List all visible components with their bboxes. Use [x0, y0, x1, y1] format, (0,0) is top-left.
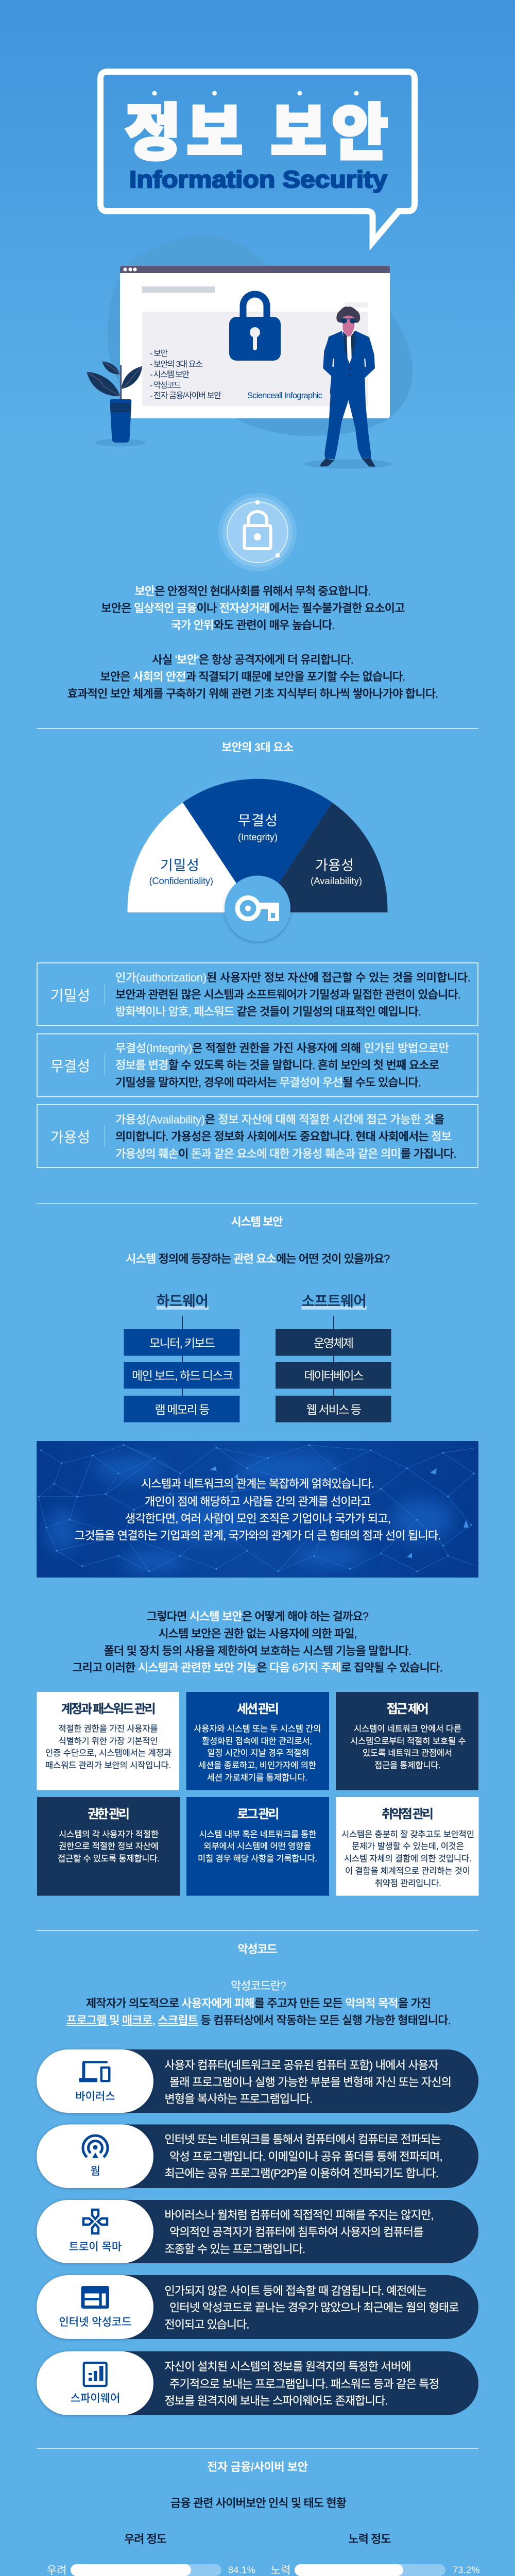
card body: 세션 가로채기를 통제합니다.	[207, 1773, 307, 1783]
availability description	[115, 1113, 457, 1160]
card: log: 로그 관리	[237, 1807, 279, 1821]
contents list: - 보안	[150, 349, 168, 358]
hardware column	[124, 1293, 239, 1422]
bubble outline	[100, 72, 415, 242]
pill: worm: 웜	[90, 2165, 100, 2177]
icon: key	[225, 876, 290, 942]
card: access control	[336, 1692, 478, 1790]
paragraph 2: 보안은 사회의 안전과 직결되기 때문에 보안을 포기할 수는 없습니다.	[100, 670, 406, 683]
confidentiality description: 인가(authorization)된 사용자만 정보 자산에 접근할 수 있는 것을 의미합니다.	[115, 971, 471, 984]
system security explanation: 그렇다면 시스템 보안은 어떻게 해야 하는 걸까요?	[147, 1610, 369, 1623]
network text	[75, 1478, 441, 1542]
spyware text: 정보를 원격지에 보내는 스파이웨어도 존재합니다.	[165, 2395, 388, 2408]
label: integrity: 무결성	[238, 813, 278, 828]
card body: 시스템으로부터 적절히 보호될 수	[350, 1736, 466, 1746]
integrity description	[115, 1042, 449, 1089]
subheading: effort: 노력 정도	[348, 2533, 391, 2546]
label: availability: 가용성	[315, 858, 354, 873]
panel: availability: 가용성	[50, 1129, 90, 1145]
card body	[58, 1829, 160, 1863]
paragraph 1: 보안은 안정적인 현대사회를 위해서 무척 중요합니다.	[135, 585, 371, 598]
card body: 세션을 종료하고, 비인가자에 의한	[198, 1760, 316, 1770]
hero illustration	[87, 235, 413, 469]
network text: 개인이 점에 해당하고 사람들 간의 관계를 선이라고	[145, 1495, 371, 1508]
speech bubble title	[100, 72, 415, 242]
integrity description: 무결성(Integrity)은 적절한 권한을 가진 사용자에 의해 인가된 방법으로만	[115, 1042, 449, 1055]
malware definition	[66, 1979, 451, 2027]
spyware text: 자신이 설치된 시스템의 정보를 원격지의 특정한 서버에	[165, 2360, 411, 2373]
card: account and password	[37, 1692, 179, 1790]
card body	[194, 1724, 321, 1783]
network text: 생각한다면, 여러 사람이 모인 조직은 기업이나 국가가 되고,	[125, 1512, 391, 1525]
pill: trojan: 트로이 목마	[69, 2241, 122, 2253]
progress bars: effort: 73.2%	[453, 2565, 480, 2575]
malware definition: 프로그램 및 매크로, 스크립트 등 컴퓨터상에서 작동하는 모든 실행 가능한 형태입니다.	[66, 2014, 451, 2027]
paragraph 2: 사실 '보안'은 항상 공격자에게 더 유리합니다.	[152, 653, 354, 666]
credit label: Scienceall Infographic	[247, 391, 322, 400]
card: vulnerability: 취약점 관리	[382, 1807, 434, 1821]
card body: 접근을 통제합니다.	[374, 1760, 441, 1770]
heading: malware: 악성코드	[238, 1943, 277, 1956]
panel: availability	[37, 1105, 478, 1167]
card body: 시스템은 충분히 잘 갖추고도 보안적인	[341, 1829, 474, 1839]
virus text: 사용자 컴퓨터(네트워크로 공유된 컴퓨터 포함) 내에서 사용자	[165, 2059, 439, 2072]
software item 1: 운영체제	[314, 1336, 354, 1350]
panel: confidentiality	[37, 963, 478, 1026]
paragraph 1	[101, 585, 405, 632]
confidentiality description: 방화벽이나 암호, 패스워드 같은 것들이 기밀성의 대표적인 예입니다.	[115, 1005, 421, 1018]
panel: confidentiality: 기밀성	[50, 988, 90, 1004]
panel: integrity	[37, 1033, 478, 1096]
card: session: 세션 관리	[237, 1702, 279, 1716]
title english: Information Security	[129, 166, 387, 193]
heading: three elements: 보안의 3대 요소	[221, 741, 294, 754]
card body: 시스템 내부 혹은 네트워크를 통한	[199, 1829, 316, 1839]
contents list: - 악성코드	[150, 381, 181, 390]
card body	[198, 1829, 317, 1863]
network text: 그것들을 연결하는 기업과의 관계, 국가와의 관계가 더 큰 형태의 점과 선이 됩니다.	[75, 1529, 441, 1542]
contents list	[150, 349, 221, 400]
system security explanation: 그리고 이러한 시스템과 관련한 보안 기능은 다음 6가지 주제로 집약될 수 있습니다.	[72, 1662, 443, 1674]
availability description: 가용성의 훼손이 돈과 같은 요소에 대한 가용성 훼손과 같은 의미를 가집니다.	[115, 1147, 457, 1160]
virus text: 몰래 프로그램이나 실행 가능한 부분을 변형해 자신 또는 자신의	[169, 2076, 452, 2089]
contents list: - 보안의 3대 요소	[150, 360, 203, 369]
contents list: - 전자 금융/사이버 보안	[150, 391, 221, 400]
card: authority: 권한 관리	[88, 1807, 130, 1821]
trojan text: 조종할 수 있는 프로그램입니다.	[165, 2243, 305, 2256]
card body: 문제가 발생할 수 있는데, 이것은	[352, 1841, 464, 1851]
card body: 활성화된 접속에 대한 관리로서,	[202, 1736, 312, 1746]
hardware item 1: 모니터, 키보드	[149, 1336, 215, 1350]
hardware item 3	[124, 1396, 239, 1422]
network text: 시스템과 네트워크의 관계는 복잡하게 얽혀있습니다.	[141, 1478, 374, 1490]
label: integrity	[238, 813, 278, 842]
heading: system security: 시스템 보안	[231, 1215, 283, 1228]
pill: virus	[37, 2049, 478, 2113]
card body: 적절한 권한을 가진 사용자를	[59, 1724, 158, 1734]
progress bars: concern	[37, 2564, 256, 2576]
pill: internet malware	[37, 2275, 478, 2339]
confidentiality description: 보안과 관련된 많은 시스템과 소프트웨어가 기밀성과 밀접한 관련이 있습니다.	[115, 988, 461, 1001]
trojan text	[165, 2209, 434, 2256]
card body: 시스템 자체의 결함에 의한 것입니다.	[344, 1854, 472, 1863]
heading: e-finance cyber security: 전자 금융/사이버 보안	[207, 2461, 308, 2473]
contents list: - 시스템 보안	[150, 370, 190, 379]
card: vulnerability	[336, 1797, 479, 1896]
progress bars: effort	[261, 2564, 480, 2576]
card: authority	[37, 1797, 180, 1896]
spyware text	[165, 2360, 439, 2408]
segment: confidentiality	[128, 803, 236, 912]
label: confidentiality: (Confidentiality)	[149, 875, 213, 886]
virus text	[165, 2059, 452, 2105]
card body	[45, 1724, 171, 1770]
pill: worm	[37, 2125, 478, 2188]
internet malware text	[165, 2284, 459, 2331]
hardware heading: 하드웨어	[157, 1293, 209, 1309]
card body: 사용자와 시스템 또는 두 시스템 간의	[194, 1724, 321, 1734]
pill: trojan	[37, 2200, 478, 2263]
card body: 시스템의 각 사용자가 적절한	[59, 1829, 159, 1839]
software item 3	[276, 1396, 391, 1422]
question: system elements: 시스템 정의에 등장하는 관련 요소에는 어떤 것이 있을까요?	[126, 1252, 390, 1265]
card body: 패스워드 관리가 보안의 시작입니다.	[45, 1760, 171, 1770]
trojan text: 악의적인 공격자가 컴퓨터에 침투하여 사용자의 컴퓨터를	[169, 2226, 424, 2239]
card body: 일정 시간이 지날 경우 적절히	[207, 1748, 309, 1758]
pill: virus: 바이러스	[75, 2091, 115, 2103]
panel: network relationship	[37, 1441, 478, 1578]
icon: devices	[79, 2061, 110, 2082]
confidentiality description	[115, 971, 471, 1018]
malware definition: 악성코드란?	[231, 1979, 286, 1992]
label: availability	[311, 858, 362, 886]
card body: 미칠 경우 해당 사항을 기록합니다.	[198, 1854, 317, 1863]
pill: spyware	[37, 2351, 478, 2415]
integrity description: 정보를 변경할 수 있도록 하는 것을 말합니다. 흔히 보안의 첫 번째 요소로	[115, 1059, 439, 1072]
card body: 권한으로 적절한 정보 자산에	[59, 1841, 159, 1851]
icon: signal	[83, 2136, 108, 2158]
card body: 외부에서 시스템에 어떤 영향을	[203, 1841, 311, 1851]
software item 2	[276, 1362, 391, 1388]
icon: web page	[81, 2286, 109, 2309]
segment: integrity	[183, 779, 332, 915]
label: integrity: (Integrity)	[238, 832, 278, 842]
software item 1	[276, 1329, 391, 1356]
virus text: 변형을 복사하는 프로그램입니다.	[165, 2093, 313, 2105]
card body	[341, 1829, 474, 1888]
intro text block	[67, 585, 438, 700]
paragraph 2: 효과적인 보안 체계를 구축하기 위해 관련 기초 지식부터 하나씩 쌓아나가야 합니다.	[67, 687, 438, 700]
paragraph 2	[67, 653, 438, 700]
card: session	[186, 1692, 329, 1790]
card body	[350, 1724, 466, 1770]
malware definition: 제작자가 의도적으로 사용자에게 피해를 주고자 만든 모든 악의적 목적을 가진	[86, 1997, 431, 2010]
panel: integrity: 무결성	[50, 1058, 90, 1074]
label: confidentiality: 기밀성	[160, 858, 199, 873]
icon: bar report	[84, 2363, 107, 2386]
icon: lock badge	[218, 493, 297, 571]
internet malware text: 전이되고 있습니다.	[165, 2318, 249, 2331]
card body: 시스템이 네트워크 안에서 다른	[354, 1724, 461, 1734]
pill: internet malware: 인터넷 악성코드	[59, 2316, 132, 2328]
card body: 있도록 네트워크 관점에서	[363, 1748, 452, 1758]
card body: 식별하기 위한 가장 기본적인	[59, 1736, 158, 1746]
title dots	[152, 91, 358, 96]
worm text: 인터넷 또는 네트워크를 통해서 컴퓨터에서 컴퓨터로 전파되는	[165, 2133, 441, 2146]
plant	[87, 361, 146, 446]
icon: diamond cross	[83, 2210, 107, 2233]
card body: 접근할 수 있도록 통제합니다.	[58, 1854, 160, 1863]
segment: availability	[258, 803, 387, 915]
card: account and password: 계정과 패스워드 관리	[61, 1702, 156, 1716]
background blob	[108, 235, 413, 436]
hardware item 2: 메인 보드, 하드 디스크	[132, 1369, 233, 1382]
hardware item 3: 램 메모리 등	[154, 1403, 210, 1416]
CIA triad diagram	[128, 779, 387, 942]
pill: spyware: 스파이웨어	[71, 2393, 120, 2404]
software item 2: 데이터베이스	[304, 1369, 364, 1382]
card body: 이 결함을 체계적으로 관리하는 것이	[345, 1866, 470, 1876]
chart title: 금융 관련 사이버보안 인식 및 태도 현황	[170, 2497, 347, 2510]
progress bars: concern: 84.1%	[228, 2565, 255, 2575]
software column	[276, 1293, 391, 1422]
internet malware text: 인가되지 않은 사이트 등에 접속할 때 감염됩니다. 예전에는	[165, 2284, 427, 2297]
worm text	[165, 2133, 443, 2180]
hardware item 1	[124, 1329, 239, 1356]
label: confidentiality	[149, 858, 213, 886]
browser window	[120, 266, 390, 418]
person in suit	[304, 307, 392, 469]
subheading: concern: 우려 정도	[124, 2533, 167, 2546]
hardware item 2	[124, 1362, 239, 1388]
title korean: 정보 보안	[125, 99, 388, 167]
system security explanation: 시스템 보안은 권한 없는 사용자에 의한 파일,	[158, 1627, 357, 1640]
software heading: 소프트웨어	[302, 1293, 367, 1309]
card body: 취약점 관리입니다.	[375, 1878, 441, 1888]
trojan text: 바이러스나 웜처럼 컴퓨터에 직접적인 피해를 주지는 않지만,	[165, 2209, 434, 2222]
paragraph 1: 국가 안위와도 관련이 매우 높습니다.	[171, 619, 335, 632]
paragraph 1: 보안은 일상적인 금융이나 전자상거래에서는 필수불가결한 요소이고	[101, 602, 405, 615]
icon: padlock	[229, 294, 281, 361]
availability description: 의미합니다. 가용성은 정보화 사회에서도 중요합니다. 현대 사회에서는 정보	[115, 1130, 452, 1143]
label: availability: (Availability)	[311, 875, 362, 886]
integrity description: 기밀성을 말하지만, 경우에 따라서는 무결성이 우선될 수도 있습니다.	[115, 1076, 421, 1089]
card body: 인증 수단으로, 시스템에서는 계정과	[45, 1748, 171, 1758]
software item 3: 웹 서비스 등	[306, 1403, 362, 1416]
card: access control: 접근 제어	[387, 1702, 429, 1716]
worm text: 최근에는 공유 프로그램(P2P)을 이용하여 전파되기도 합니다.	[165, 2167, 439, 2180]
system security explanation	[72, 1610, 443, 1674]
system security explanation: 폴더 및 장치 등의 사용을 제한하여 보호하는 시스템 기능을 말합니다.	[104, 1645, 411, 1657]
availability description: 가용성(Availability)은 정보 자산에 대해 적절한 시간에 접근 가능한 것을	[115, 1113, 444, 1126]
internet malware text: 인터넷 악성코드로 끝나는 경우가 많았으나 최근에는 웜의 형태로	[169, 2301, 459, 2314]
card: log	[186, 1797, 329, 1896]
spyware text: 주기적으로 보내는 프로그램입니다. 패스워드 등과 같은 특정	[169, 2378, 439, 2391]
worm text: 악성 프로그램입니다. 이메일이나 공유 폴더를 통해 전파되며,	[169, 2150, 443, 2163]
